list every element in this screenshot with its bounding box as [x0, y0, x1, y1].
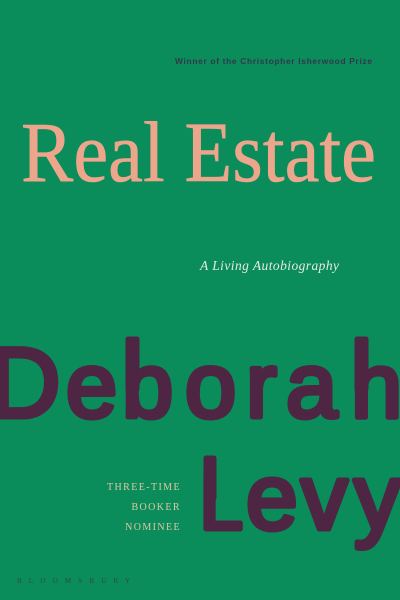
name letters: e	[66, 335, 117, 437]
author first name	[0, 327, 400, 438]
author surname	[200, 445, 400, 549]
stem extension of h	[357, 339, 366, 389]
surname letters: v	[301, 445, 348, 549]
name letters: b	[122, 335, 173, 437]
line three: NOMINEE	[125, 522, 181, 533]
name letters: r	[246, 335, 277, 437]
line two: BOOKER	[131, 502, 181, 513]
surname letters: y	[354, 445, 400, 549]
name letters: o	[185, 335, 236, 437]
name letters: a	[286, 335, 338, 437]
title: Real Estate	[21, 104, 376, 200]
stem extension of L	[206, 458, 214, 498]
prize line: Winner of the Christopher Isherwood Prize	[175, 56, 372, 66]
stem extension of b	[128, 339, 137, 389]
nomination note	[107, 482, 181, 533]
publisher: BLOOMSBURY	[17, 577, 130, 585]
line one: THREE-TIME	[107, 482, 181, 493]
surname letters: L	[200, 458, 243, 546]
subtitle: A Living Autobiography	[199, 258, 339, 273]
surname letters: e	[246, 445, 298, 549]
